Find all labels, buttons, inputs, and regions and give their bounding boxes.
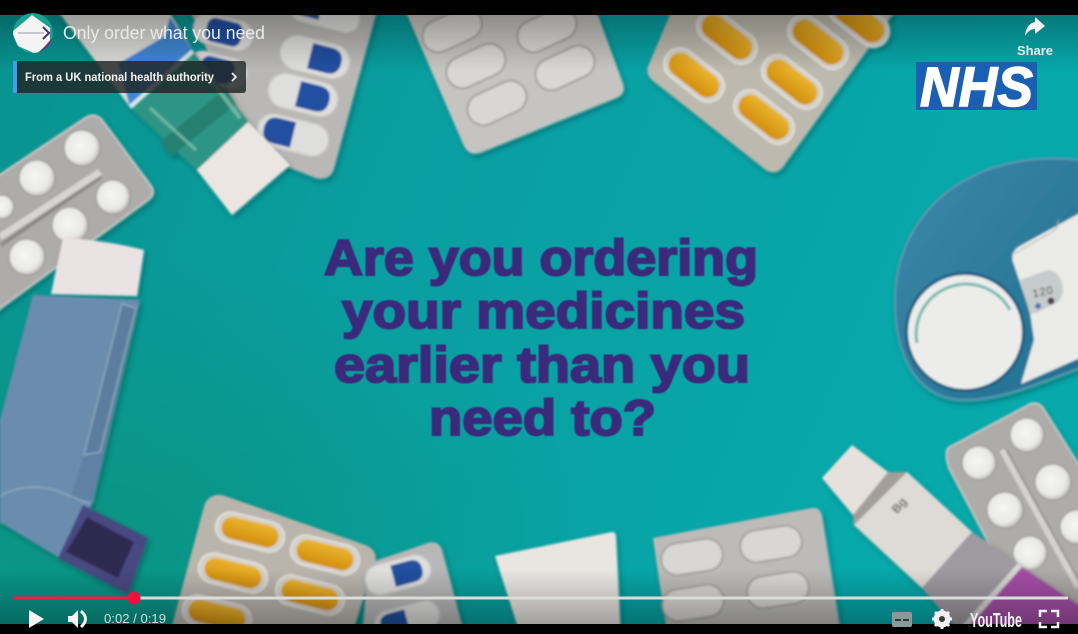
blister pack: blue capsules top left — [184, 0, 377, 179]
share button — [1017, 17, 1053, 58]
icon: fullscreen — [1040, 611, 1058, 627]
health authority badge — [13, 61, 246, 93]
main question text — [324, 230, 758, 446]
top shade — [0, 15, 1078, 70]
black bar top — [0, 0, 1078, 15]
ointment tube bottom centre — [495, 532, 621, 634]
main question text: earlier than you — [334, 337, 750, 393]
ointment tube bottom right: Bg — [889, 495, 910, 516]
ointment tube top left — [57, 10, 290, 215]
inhaler mouthpiece cap — [58, 505, 148, 594]
icon: share arrow — [1025, 17, 1045, 36]
video title: Only order what you need — [63, 23, 265, 43]
dose counter device right — [895, 158, 1078, 400]
blister pack: tablets left — [0, 115, 153, 312]
device counter window: 120 — [1032, 284, 1055, 300]
main question text: need to? — [429, 390, 656, 446]
device card line — [1014, 220, 1058, 254]
icon: subtitles — [892, 612, 912, 627]
main question text: Are you ordering — [324, 230, 758, 286]
tube cap — [197, 122, 290, 215]
device white card — [1012, 213, 1078, 384]
blister pack: white pills top centre — [405, 2, 624, 154]
device counter window — [1020, 270, 1063, 314]
progress bar — [13, 592, 1068, 604]
blister pack: yellow capsules top right — [647, 0, 896, 172]
inhaler canister — [51, 238, 144, 296]
share button: Share — [1017, 43, 1053, 58]
icon: volume — [68, 610, 86, 628]
inhaler — [0, 238, 148, 594]
YouTube wordmark: YouTube — [970, 610, 1022, 632]
blister pack: white pills bottom centre — [653, 508, 842, 634]
ointment tube bottom right — [822, 445, 1078, 634]
NHS logo: NHS — [920, 55, 1033, 118]
time display: 0:02 / 0:19 — [104, 612, 166, 626]
icon: settings gear — [932, 609, 952, 629]
blister pack: yellow capsules bottom — [168, 495, 376, 634]
blister pack: blue capsules bottom — [362, 542, 466, 634]
inhaler body — [0, 295, 140, 558]
channel logo — [13, 13, 53, 53]
icon: play — [29, 610, 44, 628]
device dial — [905, 272, 1025, 392]
main question text: your medicines — [342, 283, 745, 339]
bottom shade — [0, 570, 1078, 624]
black bar bottom — [0, 624, 1078, 634]
blister pack: tablets bottom right — [946, 403, 1078, 634]
health authority badge: From a UK national health authority — [25, 70, 214, 84]
